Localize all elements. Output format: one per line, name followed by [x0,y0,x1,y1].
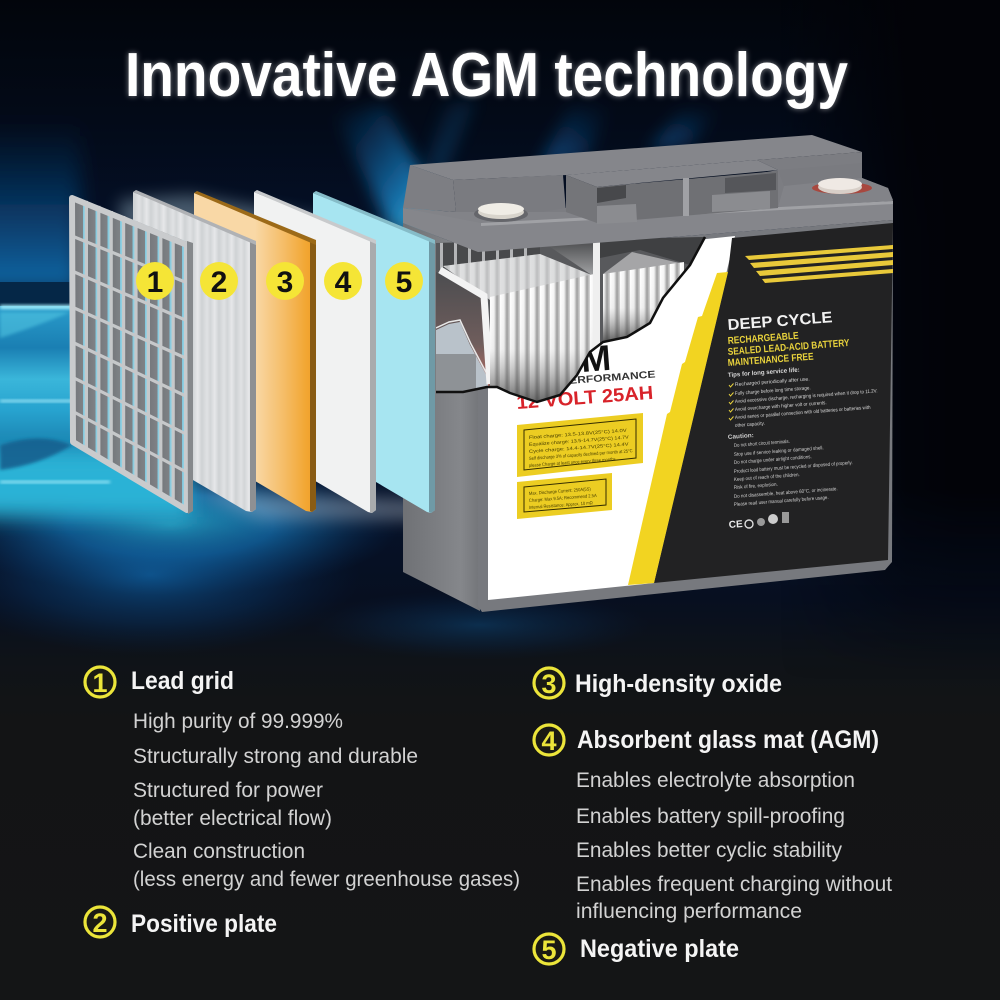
battery body [403,220,893,612]
badge 5 [385,262,423,300]
badge 3: 3 [277,266,293,299]
icon: number 1 [85,667,115,698]
tips list [728,367,878,429]
badge 2: 2 [211,266,227,299]
yellow spec stickers: Self discharge 3% of capacity declined per month at 25°C [529,448,633,461]
yellow sub-heading: SEALED LEAD-ACID BATTERY [727,338,850,358]
battery label: white panel [488,236,735,600]
negative terminal [474,203,528,222]
layer 1: lead grid [72,195,193,514]
caution list: Caution: [728,432,754,441]
caution list: Product load battery must be recycled or disposed of properly. [734,460,853,475]
fin tops [443,254,594,300]
lead grid feature list: Structurally strong and durable [133,745,418,768]
title: Innovative AGM technology [125,41,848,110]
caution list [728,432,853,508]
yellow spec stickers [517,413,643,519]
certification marks: CE [728,519,743,531]
yellow spec stickers: Internal Resistance: Approx. 10 mΩ [529,500,593,510]
light rays [335,100,720,238]
icon: number 2 [85,907,115,938]
lead grid feature list: (better electrical flow) [133,807,332,830]
lead grid feature list: Clean construction [133,840,305,863]
tips list: Avoid excessive discharge, recharging is required when it drop to 11.2V. [735,388,878,405]
upper top surface [410,135,862,180]
lower shelf [403,178,893,224]
yellow sub-heading [727,331,850,369]
glass mat feature list: Enables battery spill-proofing [576,805,845,828]
icon: number 4: 4 [541,726,557,756]
badge 1: 1 [147,266,163,299]
glass mat feature list: Enables frequent charging without [576,873,892,896]
caution list: Do not disassemble, heat above 60°C, or incinerate. [734,486,838,500]
left block front face [453,175,566,212]
badge 3 [266,262,304,300]
layer 2: positive plate [133,190,256,512]
yellow spec stickers: Float charge: 13.5-13.8V(25°C) 14.0V [529,428,628,440]
white L strip [440,270,490,384]
rim front [403,201,893,252]
yellow spec stickers: Cycle charge: 14.4-14.7V(25°C) 14.4V [529,441,630,454]
glass mat feature list: Enables electrolyte absorption [576,769,855,792]
icon: number 4 [534,725,564,756]
heading: absorbent glass mat: Absorbent glass mat (AGM) [577,726,879,754]
check marks [729,384,734,420]
yellow sub-heading: RECHARGEABLE [727,331,799,347]
glass mat feature list: Enables better cyclic stability [576,839,842,862]
battery lid [403,135,893,252]
icon: number 1: 1 [92,668,108,698]
lead grid feature list: (less energy and fewer greenhouse gases) [133,868,520,891]
vent ribs [440,240,540,268]
lead grid feature list: High purity of 99.999% [133,710,343,733]
tips list: Tips for long service life: [728,367,800,379]
layer 3: high-density oxide [194,191,316,512]
left column: lead grid and positive plate [85,667,520,938]
caution list: Do not charge under airtight conditions. [734,454,812,466]
heading: high-density oxide: High-density oxide [575,670,782,698]
battery label: white panel: AGM [526,337,612,384]
lid recess handle [566,160,778,224]
yellow sub-heading: MAINTENANCE FREE [727,352,814,369]
badge 5: 5 [396,266,412,299]
exploded layers [72,190,435,514]
heading: lead grid: Lead grid [131,667,234,695]
icon: number 3: 3 [541,669,557,699]
layer 5: negative plate [313,191,435,513]
caution list: Keep out of reach of the children. [734,472,800,483]
tips list: Recharged periodically after use. [735,376,810,388]
plate top glow [120,195,440,262]
battery label: white panel: HIGH PERFORMANCE [527,369,656,390]
deep cycle heading: DEEP CYCLE [727,309,833,334]
tips list: other capacity. [735,421,765,429]
yellow diagonal band [628,272,728,585]
battery label: white panel: 12 VOLT 25AH [516,383,654,414]
icon: number 5 [534,934,564,965]
left sloped face [403,165,456,212]
battery [403,135,893,612]
caution list: Please read user manual carefully before usage. [734,495,829,508]
certification marks [728,512,789,531]
caution list: Risk of fire, explosion. [734,482,778,491]
yellow spec stickers: Max. Discharge Current: 250A(5S) [529,486,591,496]
yellow stripes [745,245,893,283]
heading: positive plate: Positive plate [131,910,277,938]
left streaks [0,282,190,517]
right column: oxide, glass mat, negative plate [534,668,892,965]
yellow spec stickers: Equalize charge: 13.5-14.7V(25°C) 14.7V [529,434,630,447]
lead grid feature list: Structured for power [133,779,323,802]
icon: number 2: 2 [92,908,108,938]
battery label: black panel [628,223,893,585]
heading: negative plate: Negative plate [580,935,739,963]
rear wall [554,249,593,274]
inner wall left panel [436,272,490,392]
caution list: Stop use if service leaking or damaged shell. [734,445,824,458]
background with blue light glow [0,0,1000,656]
title: Innovative AGM technology [125,41,848,110]
number badges [136,262,423,300]
positive terminal [812,178,872,194]
glass mat feature list: influencing performance [576,900,802,923]
fins [490,274,594,410]
right upper face [481,152,893,223]
tips list: Fully charge before long time storage. [735,385,811,397]
yellow spec stickers: please Charge at least once every three months. [529,456,617,468]
tips list: Avoid overcharge with higher volt or currents. [735,400,827,413]
caution list: Do not short circuit terminals. [734,439,790,449]
badge 4 [324,262,362,300]
layer 4: absorbent glass mat [254,190,376,513]
icon: number 5: 5 [541,935,557,965]
cutaway interior with lead plates [436,236,705,410]
icon: number 3 [534,668,564,699]
yellow spec stickers: Charge: Max 9.5A; Recommend 2.5A [529,493,598,503]
tips list: Avoid series or parallel connection with old batteries or batteries with [735,405,871,421]
lead grid feature list [133,710,520,891]
badge 2 [200,262,238,300]
badge 1 [136,262,174,300]
glass mat feature list [576,769,892,923]
badge 4: 4 [335,266,352,299]
